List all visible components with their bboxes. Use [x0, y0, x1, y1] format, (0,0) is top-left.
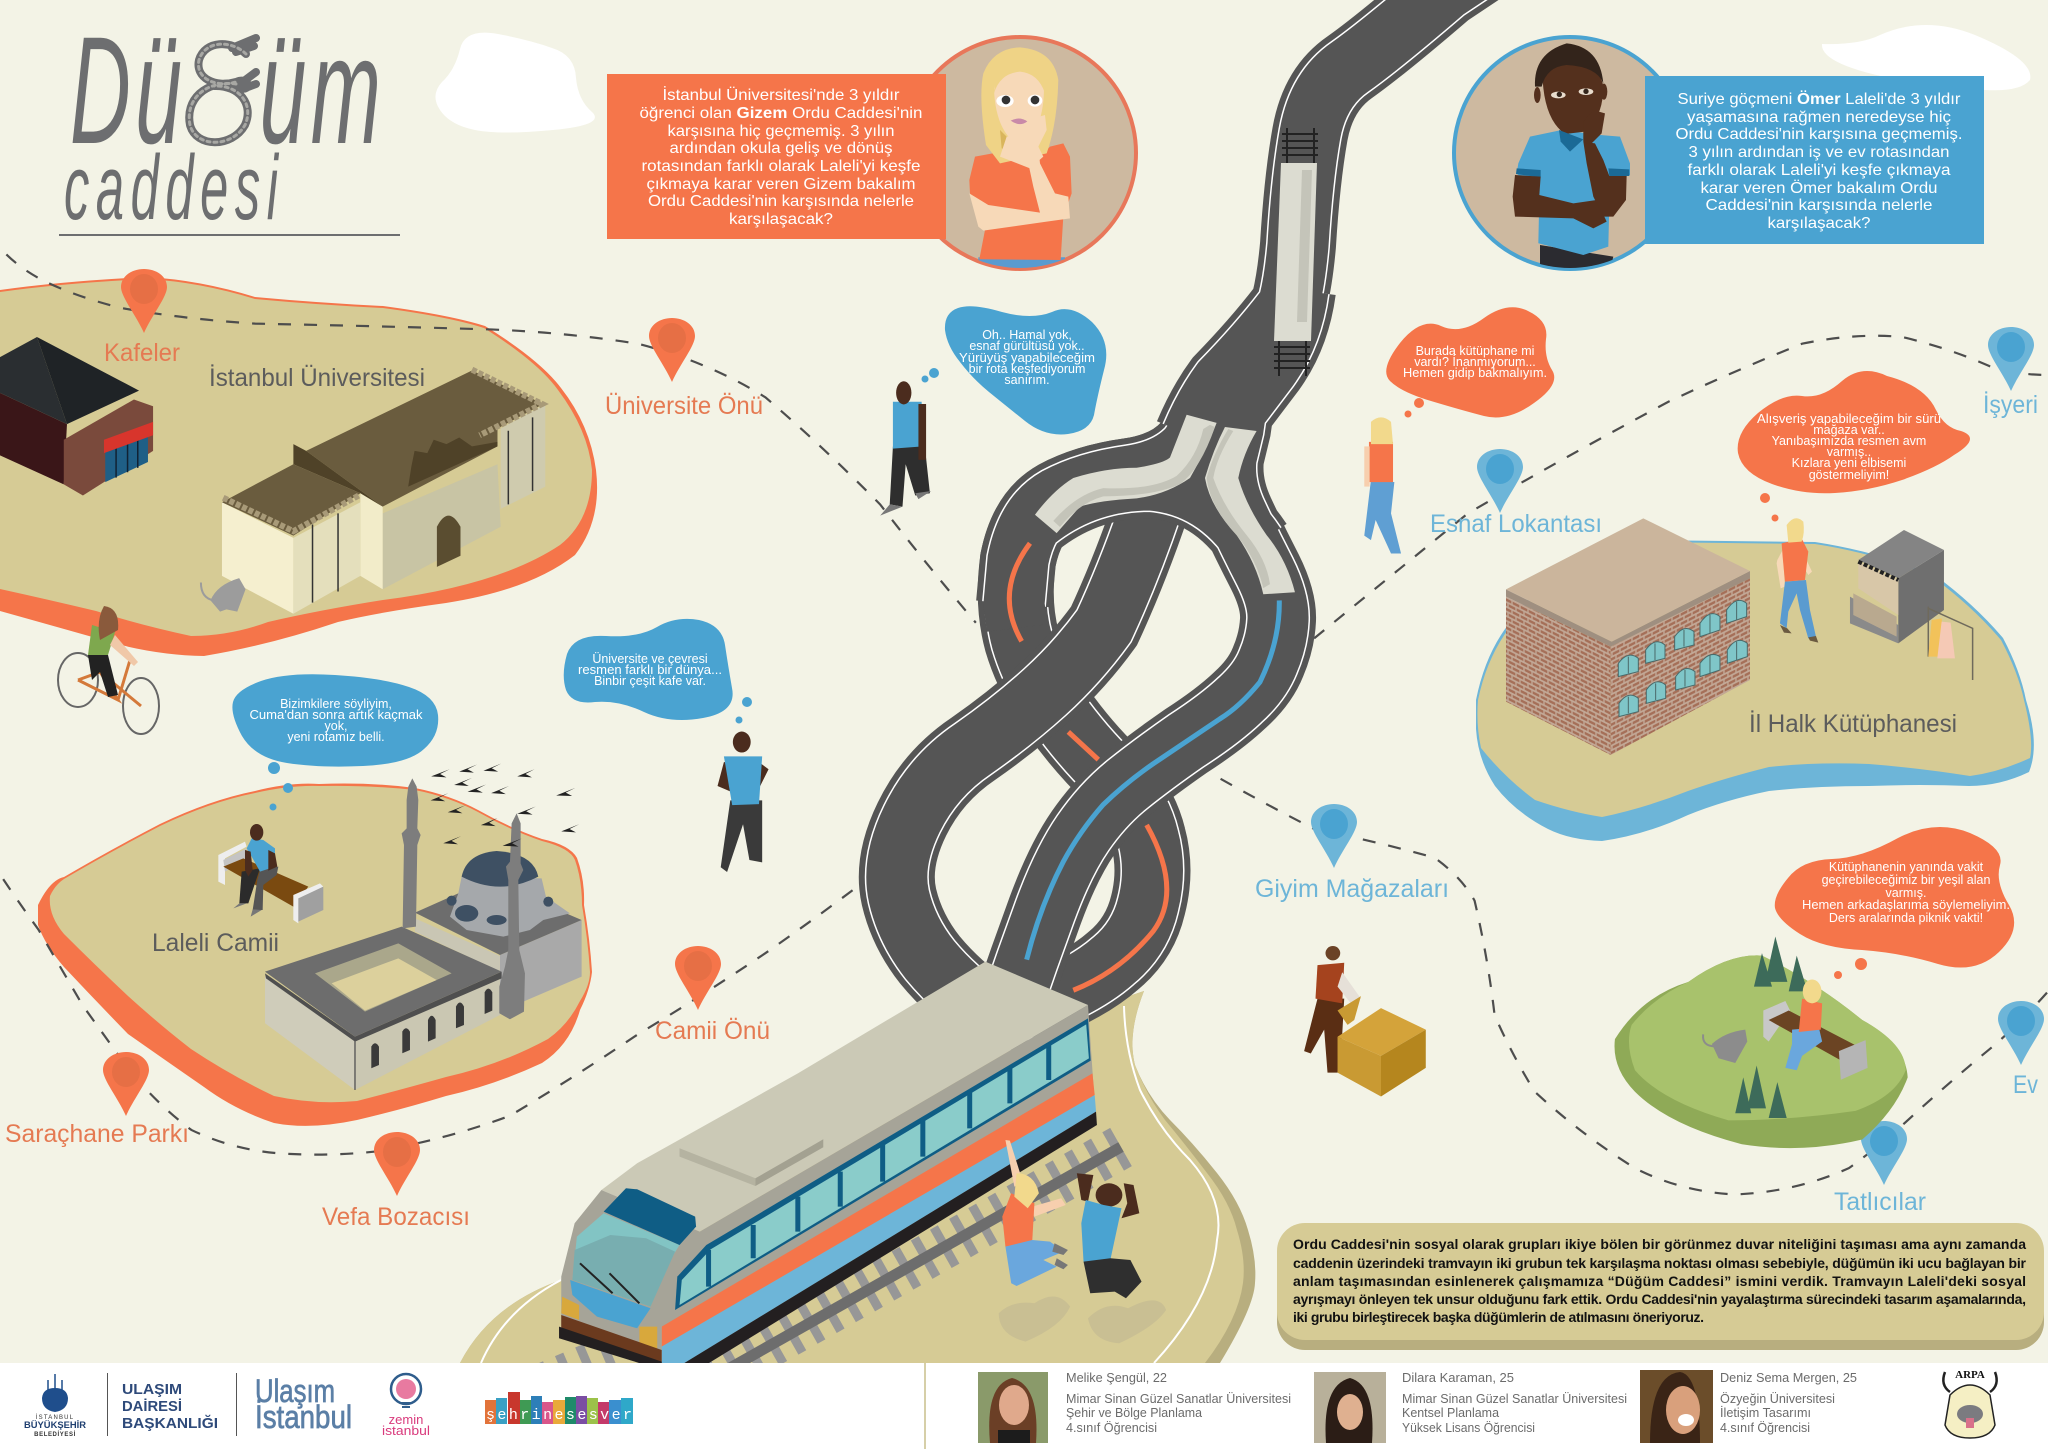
logo: ARPA yak: ARPA	[1955, 1369, 1985, 1381]
text box: Gizem: Ordu Caddesi'nin karşısında nelerle	[648, 193, 914, 210]
author photo: Melike	[978, 1372, 1048, 1443]
logo: Ulaşım Dairesi Başkanlığı: DAİRESİ	[122, 1398, 182, 1415]
logo: Ulaşım İstanbul: İstanbul	[255, 1399, 352, 1435]
island: İstanbul Üniversitesi	[0, 277, 597, 656]
pin: Kafeler	[121, 269, 167, 333]
logo: Ulaşım İstanbul: Ulaşım	[255, 1373, 335, 1409]
bubble: Alışveriş	[1738, 371, 1970, 522]
woman on bench	[1785, 1027, 1822, 1070]
logo: İstanbul Büyükşehir Belediyesi	[24, 1374, 87, 1438]
explanation panel: Ordu Caddesi'nin sosyal olarak grupları ikiye bölen bir görünmez duvar niteliğini taşıması ama aynı zamanda	[1293, 1236, 2026, 1252]
half domes	[447, 896, 553, 925]
platform lane lines	[481, 1006, 1218, 1363]
roof unit	[680, 1139, 823, 1186]
bubble: Kütüphanenin yanında: Kütüphanenin yanında vakit	[1829, 860, 1984, 874]
tram	[559, 962, 1097, 1370]
author text: Dilara: Mimar Sinan Güzel Sanatlar Üniversitesi	[1402, 1391, 1627, 1406]
bubble: Bizimkilere söyliyim: Cuma'dan sonra artık kaçmak	[250, 708, 423, 722]
road tram stop and rails	[1274, 128, 1318, 376]
place labels: İşyeri	[1983, 390, 2038, 419]
logo divider two	[236, 1373, 237, 1436]
author photo: Dilara	[1314, 1372, 1386, 1443]
portrait: Gizem	[932, 35, 1138, 271]
bubble: Kütüphanenin yanında	[1775, 827, 2014, 979]
jumping couple	[999, 1140, 1166, 1343]
text box: Gizem: öğrenci olan Gizem Ordu Caddesi'nin	[640, 105, 922, 122]
walker: man in blue near tram road	[880, 381, 931, 516]
bubble: Alışveriş: göstermeliyim!	[1809, 468, 1889, 482]
bench with seated man	[218, 824, 323, 923]
bubble: Bizimkilere söyliyim: yeni rotamız belli.	[287, 730, 385, 744]
bubble: Oh.. Hamal yok: sanırım.	[1004, 373, 1050, 387]
park bench	[1763, 1001, 1790, 1042]
bubble: Bizimkilere söyliyim	[232, 674, 438, 810]
place labels: Esnaf Lokantası	[1430, 510, 1602, 538]
text box: Ömer: karar veren Ömer bakalım Ordu	[1700, 179, 1938, 197]
bubble: Burada kütüphane: vardı? İnanmıyorum...	[1414, 355, 1536, 369]
hall roof	[415, 880, 582, 955]
text box: Ömer: Suriye göçmeni Ömer Laleli'de 3 yıldır	[1678, 89, 1961, 108]
bubble: Oh.. Hamal yok: Yürüyüş yapabileceğim	[959, 351, 1095, 365]
bubble: Oh.. Hamal yok: bir rota keşfediyorum	[969, 362, 1085, 376]
pin: İşyeri	[1988, 327, 2034, 391]
shadows	[999, 1297, 1166, 1343]
library fascia	[1506, 571, 1750, 647]
logo: Şehrine Sesver: şehrinesesver	[486, 1407, 632, 1424]
author text: Melike: Melike Şengül, 22	[1066, 1370, 1167, 1385]
text box: Gizem	[607, 74, 946, 239]
place labels: Üniversite Önü	[605, 392, 763, 420]
logo: İstanbul Büyükşehir Belediyesi: BELEDİYESİ	[34, 1431, 76, 1438]
bubble: Üniversite ve çevresi	[564, 619, 752, 724]
rail track	[540, 1147, 1121, 1385]
island: İl Halk Kütüphanesi	[1476, 540, 2034, 841]
black chassis	[684, 1112, 1097, 1363]
cat near university	[201, 578, 246, 612]
tram stop platforms on road	[1035, 415, 1295, 594]
author text: Deniz: İletişim Tasarımı	[1720, 1405, 1811, 1420]
text box: Ömer: yaşamasına rağmen neredeyse hiç	[1687, 109, 1951, 126]
place labels: Camii Önü	[655, 1017, 770, 1045]
bubble: Burada kütüphane	[1386, 307, 1554, 418]
author text: Melike	[1066, 1370, 1291, 1435]
explanation panel: iki grubu birleştirecek başka düğümlerin de atılmasını öneriyoruz.	[1293, 1309, 1704, 1325]
front windscreen	[572, 1213, 680, 1307]
island: Laleli Camii	[38, 784, 592, 1126]
logo: Ulaşım Dairesi Başkanlığı: ULAŞIM	[122, 1381, 182, 1398]
pin: Saraçhane Parkı	[103, 1052, 149, 1116]
courtyard fascia	[265, 972, 502, 1042]
mosque	[265, 778, 582, 1090]
bubble: Bizimkilere söyliyim: yok,	[325, 719, 347, 733]
pin: Vefa Bozacısı	[374, 1132, 420, 1196]
logo: İstanbul Büyükşehir Belediyesi: İSTANBUL	[36, 1414, 74, 1421]
author text: Dilara	[1402, 1370, 1627, 1435]
cafe building	[0, 337, 153, 496]
text box: Gizem: karşılaşacak?	[729, 211, 833, 228]
bubble: Oh.. Hamal yok	[922, 306, 1106, 434]
place labels: Giyim Mağazaları	[1255, 875, 1449, 903]
author text: Deniz: Özyeğin Üniversitesi	[1720, 1391, 1835, 1406]
rail top	[1282, 128, 1318, 163]
logo: Zemin İstanbul: zemin	[389, 1412, 423, 1427]
logo: İstanbul Büyükşehir Belediyesi: BÜYÜKŞEHİR	[24, 1420, 87, 1430]
bubble: Oh.. Hamal yok: esnaf gürültüsü yok..	[969, 339, 1085, 353]
author text: Deniz	[1720, 1370, 1857, 1435]
cyclist	[58, 606, 159, 734]
orange stripe	[662, 1073, 1095, 1347]
cloud left	[435, 33, 595, 132]
woman at library	[1777, 518, 1818, 643]
bubble: Burada kütüphane: Burada kütüphane mi	[1416, 344, 1534, 358]
place labels: Laleli Camii	[152, 929, 279, 957]
title word caddesi: caddesi	[64, 136, 285, 239]
cloud right	[1822, 25, 2030, 90]
pin: Üniversite Önü	[649, 318, 695, 382]
pin: Tatlıcılar	[1861, 1121, 1907, 1185]
logo: Ulaşım Dairesi Başkanlığı: BAŞKANLIĞI	[122, 1414, 218, 1432]
wipers	[580, 1263, 639, 1303]
author text: Melike: Mimar Sinan Güzel Sanatlar Üniversitesi	[1066, 1391, 1291, 1406]
bubble: Alışveriş: Kızlara yeni elbisemi	[1792, 456, 1906, 470]
explanation panel: ayrışmayı önleyen tek unsur olduğunu fark ettik. Ordu Caddesi'nin yayalaştırma sürecindeki tasarım aşamalarında,	[1293, 1291, 2026, 1307]
author text: Dilara: Dilara Karaman, 25	[1402, 1370, 1514, 1385]
pin: Camii Önü	[675, 946, 721, 1010]
dashed routes	[3, 254, 2048, 1194]
bubble: Kütüphanenin yanında: Hemen arkadaşlarıma söylemeliyim.	[1802, 898, 2010, 912]
main dome	[462, 851, 538, 887]
place labels	[5, 339, 2038, 1231]
tram body side	[662, 1005, 1096, 1363]
courtyard roof	[265, 927, 502, 1037]
tram front	[561, 1190, 700, 1360]
İstanbul Üniversitesi building	[222, 370, 545, 614]
place labels: Ev	[2013, 1071, 2038, 1099]
place labels: Kafeler	[104, 339, 180, 367]
library left wall	[1506, 597, 1611, 755]
logo: Ulaşım Dairesi Başkanlığı	[122, 1381, 218, 1432]
title	[64, 5, 385, 239]
bubble: Bizimkilere söyliyim: Bizimkilere söyliyim,	[280, 697, 392, 711]
stop platform	[1274, 163, 1317, 341]
bubble: Kütüphanenin yanında: varmış.	[1886, 886, 1926, 900]
lane markers	[1009, 543, 1279, 990]
bubble: Üniversite ve çevresi: Üniversite ve çevresi	[592, 652, 708, 666]
bubble: Kütüphanenin yanında: geçirebileceğimiz bir yeşil alan	[1822, 873, 1990, 887]
platform top	[460, 991, 1244, 1363]
text box: Ömer: Ordu Caddesi'nin karşısına geçmemiş.	[1676, 126, 1962, 143]
mover with box	[1304, 946, 1426, 1096]
wide strand	[897, 505, 1152, 1015]
place labels: İl Halk Kütüphanesi	[1749, 709, 1957, 738]
tram window frames	[709, 1043, 1049, 1287]
trees	[1735, 936, 1807, 1118]
pins	[103, 269, 2044, 1196]
text box: Gizem: çıkmaya karar veren Gizem bakalım	[646, 176, 916, 193]
logo divider one	[107, 1373, 108, 1436]
library building	[1506, 518, 1750, 755]
library windows	[1618, 600, 1747, 717]
bubble: Alışveriş: Yanıbaşımızda resmen avm	[1772, 434, 1926, 448]
front visor	[604, 1188, 696, 1245]
bubble: Alışveriş: Alışveriş yapabileceğim bir sürü	[1757, 412, 1941, 426]
park cat	[1712, 1030, 1747, 1063]
walker: blonde woman	[1364, 417, 1401, 554]
minaret right	[499, 813, 525, 1019]
pin: Esnaf Lokantası	[1477, 449, 1523, 513]
man jumping	[1077, 1173, 1142, 1298]
logo: Ulaşım İstanbul	[255, 1373, 352, 1435]
text box: Ömer: Caddesi'nin karşısında nelerle	[1706, 197, 1933, 214]
pin: Giyim Mağazaları	[1311, 804, 1357, 868]
tram windows	[675, 1018, 1091, 1310]
text box: Ömer: farklı olarak Laleli'yi keşfe çıkmaya	[1688, 162, 1951, 179]
strand passing under	[1000, 421, 1207, 1015]
bubble: Kütüphanenin yanında: Ders aralarında piknik vakti!	[1829, 911, 1983, 925]
text box: Gizem: karşısına hiç geçmemiş. 3 yılın	[668, 123, 894, 140]
author text: Dilara: Yüksek Lisans Öğrencisi	[1402, 1420, 1535, 1435]
title word Düğüm: Düğüm	[70, 5, 385, 176]
mosque hall walls	[500, 920, 582, 1003]
headlights	[561, 1297, 657, 1350]
bubble: Alışveriş: mağaza var..	[1813, 423, 1885, 437]
text box: Ömer: 3 yılın ardından iş ve ev rotasından	[1688, 144, 1950, 161]
footer divider	[924, 1363, 926, 1449]
tram roof	[601, 962, 1088, 1232]
main road and upper ring	[1010, 0, 1520, 1010]
mosque windows	[371, 989, 492, 1068]
author text: Deniz: 4.sınıf Öğrencisi	[1720, 1420, 1810, 1435]
author photo: Deniz	[1640, 1370, 1713, 1443]
text box: Gizem: ardından okula geliş ve dönüş	[670, 140, 892, 157]
walker: man hands on hips	[718, 732, 769, 872]
footer band	[0, 1363, 2048, 1449]
library roof	[1506, 518, 1750, 642]
author text: Melike: Şehir ve Bölge Planlama	[1066, 1405, 1203, 1420]
portrait: Ömer	[1454, 37, 1686, 270]
text box: Ömer	[1645, 76, 1984, 244]
place labels: Tatlıcılar	[1834, 1188, 1926, 1216]
courtyard walls	[265, 977, 355, 1090]
explanation panel: anlam taşımasından esinlenerek çalışmamıza “Düğüm Caddesi” ismini verdik. Tramvayın Laleli'deki sosyal	[1293, 1273, 2026, 1289]
bubble: Oh.. Hamal yok: Oh.. Hamal yok,	[982, 328, 1072, 342]
clothes stall	[1850, 530, 1973, 680]
text box: Ömer: karşılaşacak?	[1768, 215, 1871, 232]
text box: Gizem: rotasından farklı olarak Laleli'yi keşfe	[642, 158, 921, 175]
birds	[431, 764, 579, 847]
minaret left	[402, 778, 421, 928]
bubble: Üniversite ve çevresi: Binbir çeşit kafe var.	[594, 674, 706, 688]
author text: Melike: 4.sınıf Öğrencisi	[1066, 1420, 1157, 1435]
logo: Şehrine Sesver	[485, 1392, 633, 1424]
road knot	[897, 0, 1520, 1015]
dome drum	[450, 877, 570, 937]
explanation panel: caddenin üzerindeki tramvayın iki grubun tek karşılaşma noktası olması sebebiyle, düğümün iki ucu bağlayan bir	[1293, 1255, 2027, 1271]
logo: Zemin İstanbul: istanbul	[382, 1423, 430, 1438]
window muntins	[1628, 602, 1737, 713]
place labels: Saraçhane Parkı	[5, 1120, 189, 1148]
bubble: Alışveriş: varmış..	[1827, 445, 1871, 459]
blue stripe	[662, 1095, 1096, 1363]
bubble: Burada kütüphane: Hemen gidip bakmalıyım.	[1403, 366, 1547, 380]
park island	[1615, 936, 1908, 1148]
front base	[561, 1315, 662, 1363]
explanation panel	[1277, 1223, 2044, 1350]
place labels: İstanbul Üniversitesi	[209, 363, 425, 392]
icon: rope knot letter	[189, 38, 256, 142]
logo: Zemin İstanbul	[382, 1374, 430, 1438]
woman jumping	[1002, 1140, 1068, 1286]
place labels: Vefa Bozacısı	[322, 1203, 470, 1231]
pin: Ev	[1998, 1001, 2044, 1065]
front lower glass	[570, 1280, 651, 1328]
rail bottom	[1274, 341, 1310, 376]
title underline	[59, 234, 400, 236]
text box: Gizem: İstanbul Üniversitesi'nde 3 yıldır	[662, 85, 900, 104]
author text: Deniz: Deniz Sema Mergen, 25	[1720, 1370, 1857, 1385]
bubble: Üniversite ve çevresi: resmen farklı bir dünya...	[578, 663, 722, 677]
logo: ARPA yak	[1943, 1369, 1997, 1438]
library right wall	[1611, 578, 1750, 755]
author text: Dilara: Kentsel Planlama	[1402, 1405, 1500, 1420]
tan platform	[460, 991, 1255, 1363]
